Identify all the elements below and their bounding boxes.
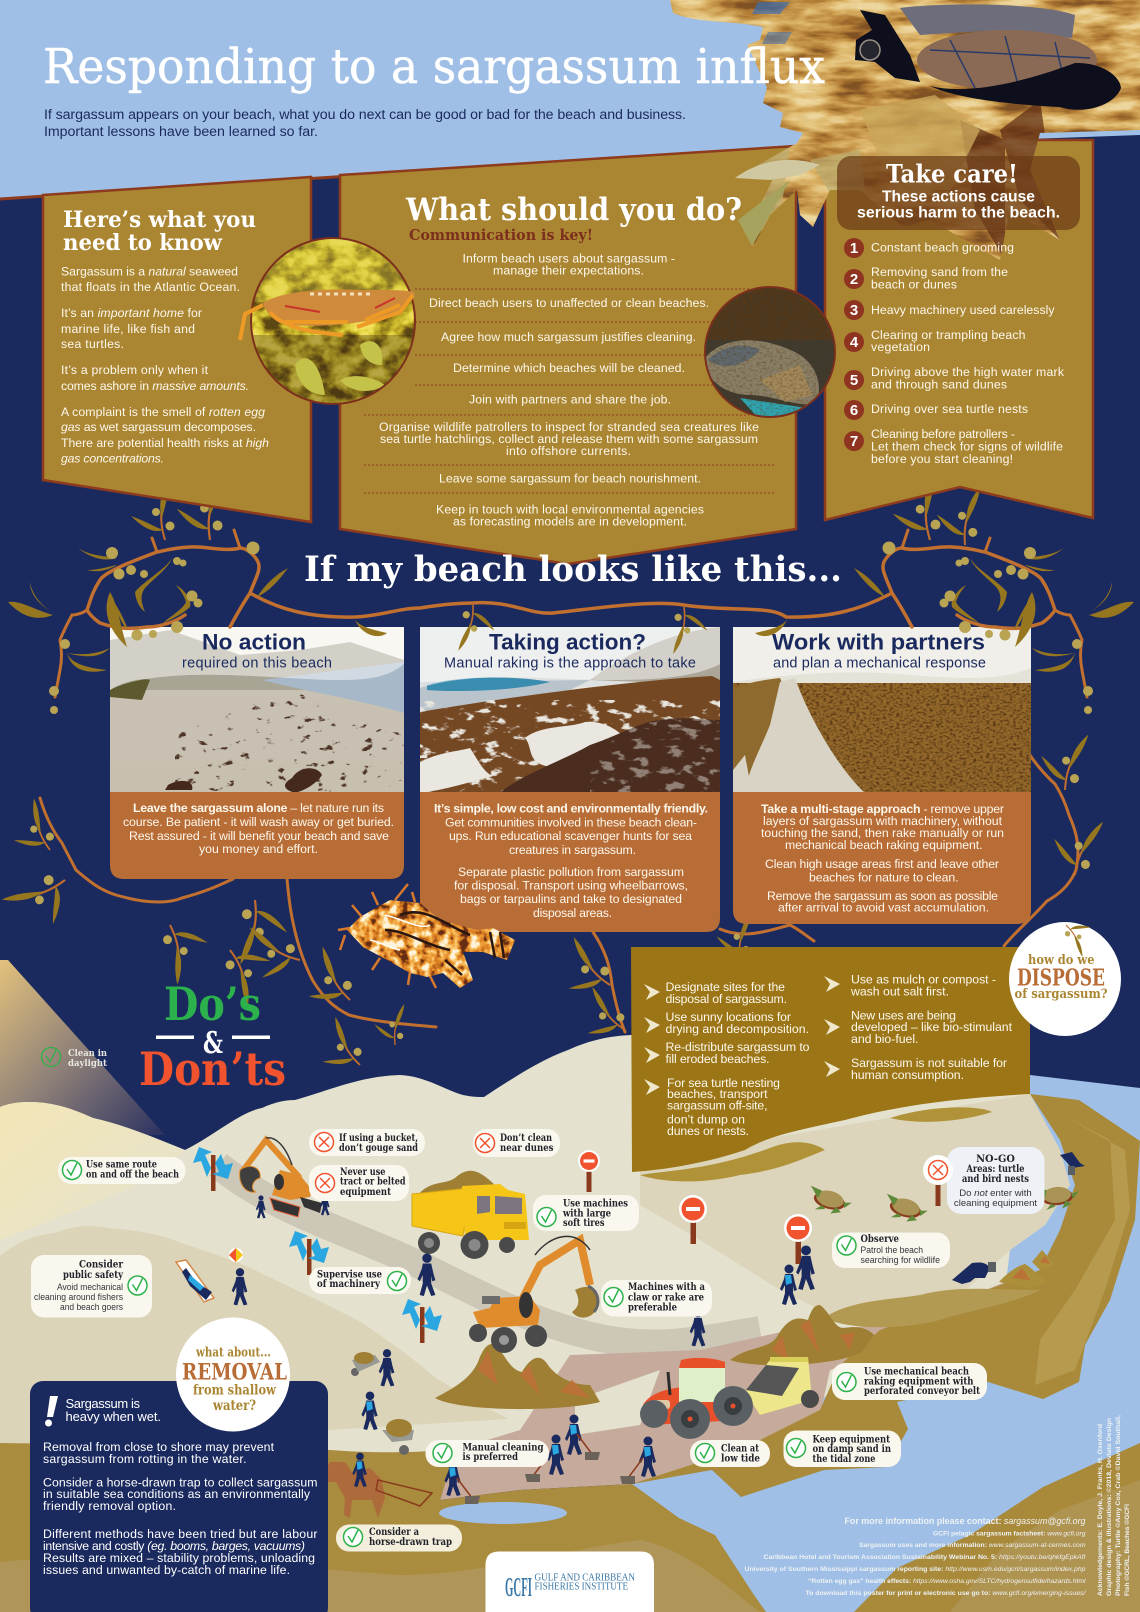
bottom right land — [854, 1443, 1140, 1612]
numbered bullets: 4 — [850, 334, 859, 351]
advice text: you money and effort. — [199, 842, 318, 856]
dispose text: fill eroded beaches. — [666, 1052, 770, 1066]
callout: tracks: Never use — [340, 1167, 386, 1178]
callout: no-go: Areas: turtle — [966, 1164, 1024, 1175]
lower dune — [0, 1226, 509, 1450]
removal text: sargassum from rotting in the water. — [43, 1452, 246, 1466]
callout: no-go: cleaning equipment — [954, 1198, 1037, 1209]
numbered bullets: 3 — [850, 302, 858, 319]
excavator with bucket — [240, 1138, 322, 1217]
facts text: gas concentrations. — [61, 452, 164, 466]
callout: horse: horse-drawn trap — [369, 1537, 452, 1548]
advice text — [761, 802, 1004, 914]
harm list: Driving over sea turtle nests — [871, 402, 1028, 416]
credits: GCFI pelagic sargassum factsheet: www.gcfi.org — [933, 1530, 1086, 1538]
action list: manage their expectations. — [493, 264, 644, 278]
excavator with claw — [469, 1236, 599, 1353]
callout: manual: Manual cleaning — [462, 1442, 544, 1454]
dispose text: Designate sites for the — [666, 980, 785, 994]
harm list: beach or dunes — [871, 278, 957, 292]
acknowledgements: Acknowledgements: E. Doyle, J. Franks, H. Oxenford — [1097, 1424, 1104, 1596]
advice text: bags or tarpaulins and take to designated — [460, 892, 682, 906]
harm list: before you start cleaning! — [871, 452, 1013, 466]
people — [256, 1152, 1085, 1496]
lower branches — [0, 722, 1109, 1080]
dispose text: human consumption. — [851, 1068, 964, 1082]
callout: soft tires: Use machines — [563, 1198, 628, 1210]
advice text: Rest assured - it will benefit your beach and save — [129, 829, 389, 843]
dispose text: drying and decomposition. — [666, 1022, 809, 1036]
heading: if my beach looks like this: If my beach looks like this... — [304, 549, 842, 590]
callout: conveyor: raking equipment with — [864, 1376, 974, 1388]
advice text: Clean high usage areas first and leave other — [765, 857, 999, 871]
removal lead: Sargassum is — [66, 1396, 140, 1411]
facts text: comes ashore in massive amounts. — [61, 379, 249, 393]
action list: Inform beach users about sargassum - — [462, 252, 675, 266]
action list: Keep in touch with local environmental agencies — [436, 502, 704, 516]
logo text: GULF AND CARIBBEAN — [534, 1572, 635, 1584]
callout: bucket: don’t gouge sand — [339, 1143, 418, 1154]
callout: soft tires: with large — [562, 1208, 611, 1220]
callout: public safety: public safety — [63, 1270, 123, 1281]
card title — [772, 630, 986, 672]
credits: “Rotten egg gas” health effects: https://www.osha.gov/SLTC/hydrogensulfide/hazards.html — [808, 1578, 1086, 1585]
callout: public safety: Consider — [79, 1260, 124, 1270]
icon: exclamation — [45, 1396, 58, 1426]
dispose circle text — [1014, 953, 1108, 1002]
title: Responding to a sargassum influx — [43, 39, 825, 95]
facts text: that floats in the Atlantic Ocean. — [61, 280, 240, 294]
credits — [744, 1516, 1087, 1597]
top branch: centre — [250, 593, 892, 659]
credits: Caribbean Hotel and Tourism Association Sustainability Webinar No. 5: https://youtu.be/qhkfgEpkAfI — [763, 1554, 1086, 1561]
card title: No action — [202, 630, 306, 654]
dispose panel — [631, 947, 1030, 1181]
wheelbarrows — [351, 1352, 414, 1455]
harm list: vegetation — [871, 340, 930, 354]
removal circle text: REMOVAL — [182, 1360, 287, 1386]
intro text: Important lessons have been learned so far. — [44, 124, 318, 140]
harm list: Clearing or trampling beach — [871, 328, 1026, 342]
dispose circle text: DISPOSE — [1017, 964, 1105, 992]
harm list: Let them check for signs of wildlife — [871, 440, 1063, 454]
facts text — [61, 264, 269, 466]
callout: same route — [58, 1157, 186, 1184]
callout: low tide: Clean at — [721, 1444, 759, 1454]
callout: bucket — [309, 1129, 425, 1156]
advice text: course. Be patient - it will wash away or get buried. — [123, 815, 394, 829]
callout: supervise — [309, 1267, 411, 1294]
sargassum pile left — [435, 1344, 600, 1409]
credits: Sargassum uses and more information: www.sargassum-at-cermes.com — [859, 1542, 1086, 1549]
advice text: Leave the sargassum alone – let nature run its — [133, 801, 384, 815]
lighter foreground — [0, 1540, 760, 1612]
removal box — [30, 1381, 328, 1612]
beach goers — [176, 1248, 247, 1305]
callout: public safety — [31, 1255, 152, 1318]
card title: Manual raking is the approach to take — [444, 656, 696, 672]
action list: into offshore currents. — [506, 444, 631, 458]
callout: horse: Consider a — [369, 1527, 420, 1538]
pond — [439, 1502, 567, 1524]
numbered bullets — [844, 238, 864, 451]
advice text: touching the sand, then rake manually or run — [761, 826, 1004, 840]
do's and don'ts heading: Do’s — [164, 977, 261, 1031]
right beach — [640, 1094, 1070, 1315]
callout: observe: Observe — [860, 1234, 899, 1245]
harm list: Removing sand from the — [871, 265, 1008, 279]
panel: what should you do — [340, 146, 796, 564]
numbered bullets: 5 — [850, 372, 858, 389]
callout: claw: Machines with a — [628, 1282, 706, 1293]
callout: public safety: Avoid mechanical — [57, 1282, 123, 1293]
dispose text: Sargassum is not suitable for — [851, 1056, 1007, 1070]
action list — [379, 252, 759, 528]
dispose text: developed – like bio-stimulant — [851, 1020, 1013, 1034]
facts text: Sargassum is a natural seaweed — [61, 264, 238, 278]
facts text: A complaint is the smell of rotten egg — [61, 405, 265, 419]
dispose text: and bio-fuel. — [851, 1032, 918, 1046]
take care description: These actions cause — [882, 188, 1035, 206]
dump truck — [412, 1171, 529, 1259]
callout: low tide: low tide — [721, 1454, 760, 1464]
numbered bullets: 1 — [850, 240, 858, 257]
turtles — [805, 1185, 1080, 1226]
advice text: Take a multi-stage approach - remove upper — [761, 802, 1004, 816]
harm list: Driving above the high water mark — [871, 365, 1065, 379]
facts text: It’s a problem only when it — [61, 363, 209, 377]
advice text: Get communities involved in these beach clean- — [445, 816, 697, 830]
removal text: Removal from close to shore may prevent — [43, 1440, 275, 1454]
removal text: intensive and costly (eg. booms, barges, vacuums) — [43, 1539, 305, 1553]
callout: damp sand: the tidal zone — [812, 1454, 876, 1465]
callout: dunes: near dunes — [500, 1143, 554, 1154]
brown ground — [0, 1094, 1140, 1612]
callout: bucket: If using a bucket, — [339, 1133, 418, 1144]
panel: take care — [825, 140, 1093, 520]
sargassum piles — [478, 1250, 1055, 1398]
callout: tracks: tract or belted — [340, 1176, 406, 1188]
callout: soft tires: soft tires — [563, 1218, 605, 1229]
numbered bullets: 6 — [850, 402, 858, 419]
callout: public safety: cleaning around fishers — [34, 1292, 123, 1303]
callout: same route: Use same route — [86, 1160, 157, 1170]
clean in daylight — [42, 1048, 108, 1069]
harm list: Heavy machinery used carelessly — [871, 303, 1055, 317]
card title: and plan a mechanical response — [773, 656, 986, 672]
facts text: sea turtles. — [61, 337, 124, 351]
heading: need to know: Here’s what you — [63, 207, 256, 233]
photo: fish — [702, 286, 836, 420]
action list: Organise wildlife patrollers to inspect for stranded sea creatures like — [379, 420, 759, 434]
callout: tracks: equipment — [340, 1187, 391, 1198]
acknowledgements: Fish ©GCRL, Beaches ©GCFI — [1123, 1504, 1131, 1596]
advice text: for disposal. Transport using wheelbarrows, — [454, 878, 688, 892]
take care description: serious harm to the beach. — [857, 204, 1060, 222]
do's and don'ts heading: & — [203, 1026, 223, 1061]
advice text: Separate plastic pollution from sargassum — [458, 865, 684, 879]
callout: dunes — [473, 1129, 560, 1157]
card title: Work with partners — [772, 630, 985, 654]
dispose circle — [1009, 915, 1121, 1036]
card: no action — [110, 627, 404, 879]
subheading: Communication is key! — [409, 226, 593, 244]
callout: soft tires — [533, 1195, 639, 1231]
facts text: gas as wet sargassum decomposes. — [61, 420, 256, 434]
photo: heavily covered beach — [733, 627, 1031, 793]
callout: supervise: of machinery — [317, 1279, 380, 1290]
facts text: marine life, like fish and — [61, 322, 195, 336]
clean in daylight: daylight — [68, 1059, 108, 1069]
removal circle text: what about... — [195, 1346, 271, 1360]
removal text: Different methods have been tried but are labour — [43, 1527, 318, 1541]
small sand brown patches — [824, 1289, 1040, 1327]
callout: public safety: and beach goers — [60, 1302, 123, 1313]
callout: manual: is preferred — [462, 1452, 518, 1463]
do's and don'ts heading: Don’ts — [139, 1042, 286, 1096]
photo: crab in sargassum — [240, 237, 416, 405]
dispose text: sargassum off-site, — [667, 1098, 768, 1112]
panel: here's what you need to know — [43, 177, 311, 522]
callout: dunes: Don’t clean — [500, 1133, 552, 1144]
dispose text — [666, 972, 1013, 1138]
circle sprig — [1061, 915, 1102, 959]
logo text — [534, 1572, 635, 1592]
callout: same route: on and off the beach — [86, 1170, 179, 1180]
dispose text: don’t dump on — [667, 1112, 745, 1126]
acknowledgements: Graphic design & illustrations: ©2018, Deviate Design — [1105, 1418, 1113, 1596]
callouts — [31, 1129, 1044, 1552]
callout: no-go: NO-GO — [976, 1154, 1015, 1165]
card title — [182, 630, 332, 672]
advice text: mechanical beach raking equipment. — [785, 838, 982, 852]
dispose text: Use sunny locations for — [666, 1010, 791, 1024]
credits: For more information please contact: sargassum@gcfi.org — [844, 1516, 1086, 1526]
callout: no-go: and bird nests — [962, 1174, 1029, 1185]
panel sprigs behind — [131, 469, 987, 547]
removal circle text — [182, 1346, 287, 1414]
advice text — [123, 801, 394, 856]
water — [620, 1075, 1140, 1612]
raking machine — [745, 1357, 819, 1415]
card: work with partners — [733, 627, 1031, 924]
callout: claw: claw or rake are — [628, 1292, 704, 1304]
take care description — [857, 188, 1060, 222]
dispose text: For sea turtle nesting — [667, 1076, 780, 1090]
callout: supervise: Supervise use — [317, 1270, 382, 1280]
callout: damp sand — [784, 1430, 901, 1467]
photo: moderately covered beach — [420, 627, 720, 793]
removal lead — [66, 1396, 161, 1424]
dune highlight — [0, 1102, 185, 1240]
left mountain — [0, 960, 165, 1135]
do's and don'ts heading — [139, 977, 286, 1096]
advice text: creatures in sargassum. — [509, 843, 636, 857]
acknowledgements — [1097, 1415, 1131, 1596]
advice text: ups. Run educational scavenger hunts for sea — [449, 829, 692, 843]
direction signs — [193, 1147, 442, 1343]
facts text: There are potential health risks at high — [61, 436, 269, 450]
sargassum and turtle photo — [660, 0, 1140, 270]
acknowledgements: Photography: Turtle ©Amy Cox, Crab ©David Southall, — [1114, 1415, 1122, 1596]
rakes — [457, 1434, 643, 1504]
removal text: in suitable sea conditions as an environmentally — [43, 1487, 311, 1501]
card title: required on this beach — [182, 656, 332, 672]
advice text: It’s simple, low cost and environmentally friendly. — [434, 802, 708, 816]
removal text — [43, 1440, 318, 1577]
removal text: Consider a horse-drawn trap to collect sargassum — [43, 1476, 318, 1490]
callout: manual — [426, 1440, 549, 1467]
callout: claw: preferable — [628, 1302, 677, 1314]
logo text: FISHERIES INSTITUTE — [534, 1582, 628, 1592]
horse and trap — [324, 1453, 432, 1518]
card: taking action — [420, 627, 720, 932]
intro text — [44, 107, 686, 140]
callout: conveyor: Use mechanical beach — [864, 1366, 969, 1378]
dotted dividers — [364, 289, 775, 493]
no-entry signs — [578, 1150, 812, 1264]
callout: damp sand: Keep equipment — [812, 1434, 890, 1446]
photo: lightly covered beach — [110, 627, 404, 793]
dispose text: New uses are being — [851, 1008, 956, 1022]
heading: take care: Take care! — [886, 160, 1018, 188]
card title: Taking action? — [489, 630, 646, 654]
callout: observe — [832, 1232, 950, 1268]
action list: Determine which beaches will be cleaned. — [453, 361, 685, 375]
heading: need to know — [63, 207, 256, 256]
advice text box — [110, 792, 404, 879]
action list: Agree how much sargassum justifies cleaning. — [441, 330, 696, 344]
dispose circle text: how do we — [1028, 953, 1094, 968]
harm list: Cleaning before patrollers - — [871, 427, 1015, 441]
advice text: beaches for nature to clean. — [809, 870, 958, 884]
action list: Leave some sargassum for beach nourishment. — [439, 472, 701, 486]
tree: right top — [755, 530, 1134, 714]
numbered bullets: 2 — [850, 271, 858, 288]
sand wedge — [575, 1370, 660, 1435]
turtle — [855, 4, 1121, 110]
callout: claw — [601, 1280, 712, 1316]
removal circle text: water? — [212, 1398, 256, 1414]
callout: low tide — [690, 1440, 770, 1467]
sky — [0, 0, 1140, 199]
intro text: If sargassum appears on your beach, what you do next can be good or bad for the beach and business. — [44, 107, 686, 123]
dispose text: disposal of sargassum. — [666, 992, 787, 1006]
credits: To download this poster for print or electronic use go to: www.gcfi.org/emerging-issues/ — [806, 1590, 1087, 1597]
dispose text: Use as mulch or compost - — [851, 972, 996, 986]
harm list: Constant beach grooming — [871, 240, 1014, 254]
chevrons — [644, 976, 840, 1095]
removal text: issues and unwanted by-catch of marine life. — [43, 1563, 290, 1577]
dispose text: dunes or nests. — [667, 1124, 749, 1138]
fish — [335, 884, 520, 993]
action list: sea turtle hatchlings, collect and release them with some sargassum — [380, 432, 758, 446]
action list: Direct beach users to unaffected or clean beaches. — [429, 296, 709, 310]
dispose circle text: of sargassum? — [1014, 987, 1108, 1002]
clean in daylight: Clean in — [68, 1049, 107, 1059]
heading: need to know: need to know — [63, 230, 223, 256]
logo box — [486, 1552, 654, 1612]
advice text: layers of sargassum with machinery, without — [763, 814, 1003, 828]
callout: tracks — [309, 1165, 409, 1201]
callout: conveyor: perforated conveyor belt — [864, 1386, 980, 1397]
removal circle — [176, 1318, 290, 1432]
diagonal line — [0, 147, 790, 199]
dispose text: Re-distribute sargassum to — [666, 1040, 810, 1054]
tractor and raking machine — [640, 1357, 819, 1439]
action list: as forecasting models are in development. — [453, 514, 687, 528]
harm list: and through sand dunes — [871, 378, 1007, 392]
callout: horse — [336, 1524, 462, 1552]
take care box — [837, 156, 1080, 230]
action list: Join with partners and share the job. — [469, 392, 671, 406]
removal text: friendly removal option. — [43, 1499, 176, 1513]
removal circle text: from shallow — [193, 1382, 277, 1398]
credits: University of Southern Mississippi sargassum reporting site: http://www.usm.edu/gcrl/sargassum/index.php — [744, 1566, 1086, 1573]
removal text: Results are mixed – stability problems, unloading — [43, 1551, 315, 1565]
advice text: disposal areas. — [533, 906, 612, 920]
right brown band — [632, 1094, 1140, 1497]
heading: what should you do: What should you do? — [405, 192, 742, 228]
advice text box — [733, 792, 1031, 924]
callout: observe: searching for wildlife — [860, 1255, 940, 1266]
advice text: Remove the sargassum as soon as possible — [767, 889, 998, 903]
dispose text: wash out salt first. — [850, 984, 949, 998]
logo box: GCFI — [505, 1572, 532, 1602]
tide strip — [440, 1280, 1085, 1500]
removal lead: heavy when wet. — [66, 1409, 161, 1424]
dispose text: beaches, transport — [667, 1087, 768, 1101]
advice text: after arrival to avoid vast accumulation. — [778, 900, 989, 914]
harm list — [844, 238, 1065, 466]
card title — [444, 630, 696, 672]
tree: left top — [8, 530, 387, 714]
tracks — [218, 1165, 760, 1343]
callout: damp sand: on damp sand in — [812, 1444, 891, 1455]
callout: no-go: Do not enter with — [959, 1188, 1032, 1199]
advice text — [434, 802, 708, 920]
callout: conveyor — [832, 1363, 987, 1400]
facts text: It’s an important home for — [61, 306, 202, 320]
numbered bullets: 7 — [850, 433, 858, 450]
callout: observe: Patrol the beach — [860, 1245, 923, 1256]
advice text box — [420, 792, 720, 932]
callout: no-go — [923, 1147, 1044, 1214]
beach sand — [0, 1035, 1085, 1500]
